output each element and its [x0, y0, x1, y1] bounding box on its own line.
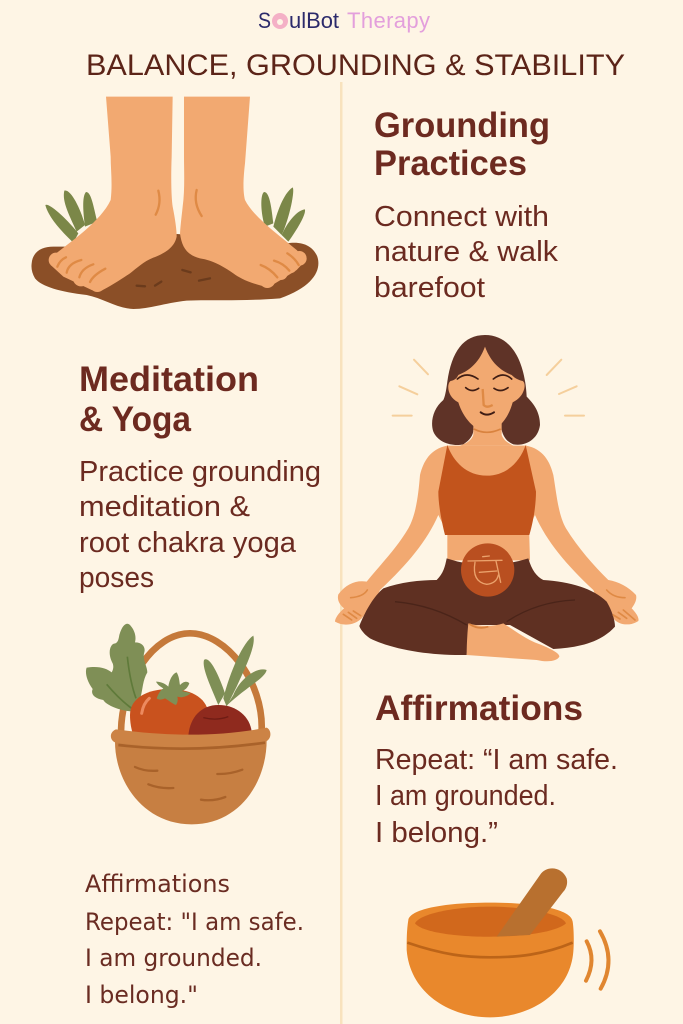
text block: meditation and yoga: Practice grounding	[79, 456, 321, 488]
icon: bare feet on soil	[31, 97, 318, 309]
carrot tops	[204, 636, 267, 707]
text block: affirmations: Repeat: “I am safe.	[375, 744, 618, 776]
text block: grounding practices: Connect with	[374, 201, 549, 233]
right arm	[523, 446, 639, 624]
text block: meditation and yoga: root chakra yoga	[79, 527, 297, 559]
text block: affirmations	[375, 689, 618, 849]
neck	[460, 422, 513, 446]
mallet	[497, 868, 567, 937]
tomato	[130, 689, 208, 736]
illustration: meditating woman	[335, 335, 639, 661]
text block: grounding practices: nature & walk	[374, 236, 559, 268]
foot	[467, 623, 559, 661]
text block: meditation and yoga: & Yoga	[79, 400, 192, 439]
logo: SoulBot Therapy: ulBot	[289, 8, 339, 33]
text block: grounding practices: barefoot	[374, 272, 485, 304]
text block: meditation and yoga	[79, 360, 321, 594]
beet	[188, 705, 252, 737]
left arm	[335, 446, 450, 625]
logo: SoulBot Therapy: Therapy	[347, 8, 430, 33]
leafy greens	[86, 624, 147, 712]
tank top	[438, 445, 536, 535]
face	[448, 347, 525, 431]
pants	[359, 558, 615, 655]
icon: singing bowl	[407, 868, 609, 1017]
text block: affirmations caption: I belong."	[85, 981, 198, 1009]
logo: SoulBot Therapy	[258, 8, 430, 33]
title: BALANCE, GROUNDING & STABILITY	[86, 49, 625, 82]
illustration: vegetable basket	[86, 624, 270, 824]
text block: meditation and yoga: Meditation	[79, 360, 259, 399]
text block: grounding practices	[374, 106, 559, 304]
text block: grounding practices: Grounding	[374, 106, 550, 145]
hand details	[343, 590, 635, 620]
hair	[432, 335, 540, 445]
sound waves	[586, 931, 609, 989]
text block: affirmations caption: I am grounded.	[85, 944, 262, 972]
root chakra symbol	[461, 543, 514, 597]
tomato calyx	[156, 672, 191, 705]
text block: affirmations caption: Affirmations	[85, 870, 230, 898]
text block: affirmations: I belong.”	[375, 817, 498, 849]
logo: SoulBot Therapy: S	[258, 8, 271, 33]
handle	[121, 633, 262, 732]
text block: meditation and yoga: poses	[79, 562, 154, 594]
basket body	[115, 740, 267, 824]
text block: affirmations caption: Repeat: "I am safe.	[85, 908, 304, 936]
text block: meditation and yoga: meditation &	[79, 491, 250, 523]
text block: affirmations: I am grounded.	[375, 780, 556, 812]
text block: grounding practices: Practices	[374, 144, 527, 183]
text block: affirmations: Affirmations	[375, 689, 583, 728]
torso skin	[447, 446, 530, 560]
text block: affirmations caption	[85, 870, 304, 1009]
bowl	[407, 903, 574, 1017]
rays	[393, 360, 584, 416]
